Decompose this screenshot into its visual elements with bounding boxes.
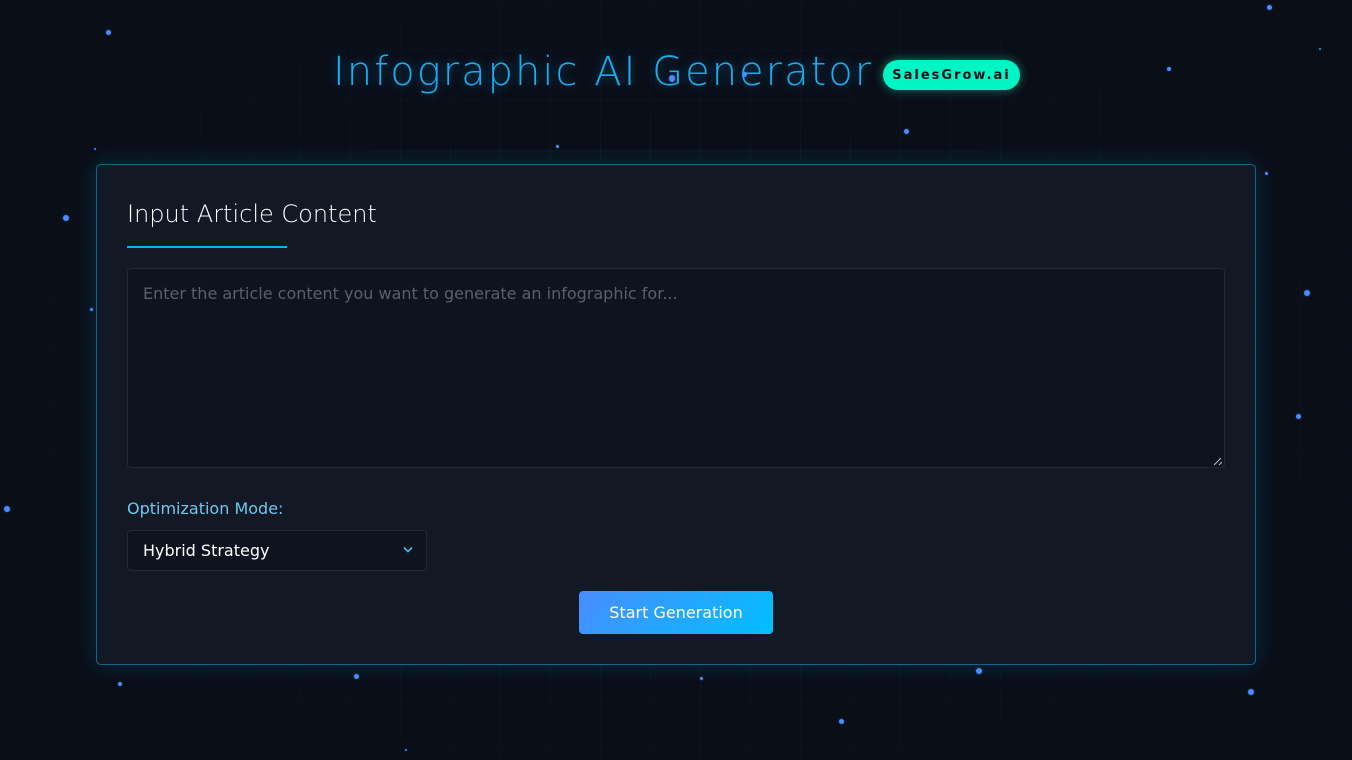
button: start generation	[579, 591, 773, 634]
panel: input article content	[96, 164, 1256, 665]
icon: resize handle	[1214, 458, 1222, 466]
select value: Hybrid Strategy	[143, 541, 269, 560]
placeholder text: Enter the article content you want to generate an infographic for...	[143, 284, 678, 303]
title: Infographic AI Generator	[333, 49, 873, 95]
select: hybrid strategy	[127, 530, 427, 571]
icon: chevron	[404, 546, 412, 552]
panel heading: Input Article Content	[127, 200, 377, 228]
heading underline	[127, 246, 287, 248]
label: optimization mode: Optimization Mode:	[127, 499, 283, 518]
badge: SalesGrow.ai	[883, 60, 1020, 90]
particles over title	[668, 70, 748, 84]
badge: SalesGrow.ai: SalesGrow.ai	[892, 68, 1011, 83]
text input area	[127, 268, 1225, 468]
button: start generation: Start Generation	[609, 603, 743, 622]
